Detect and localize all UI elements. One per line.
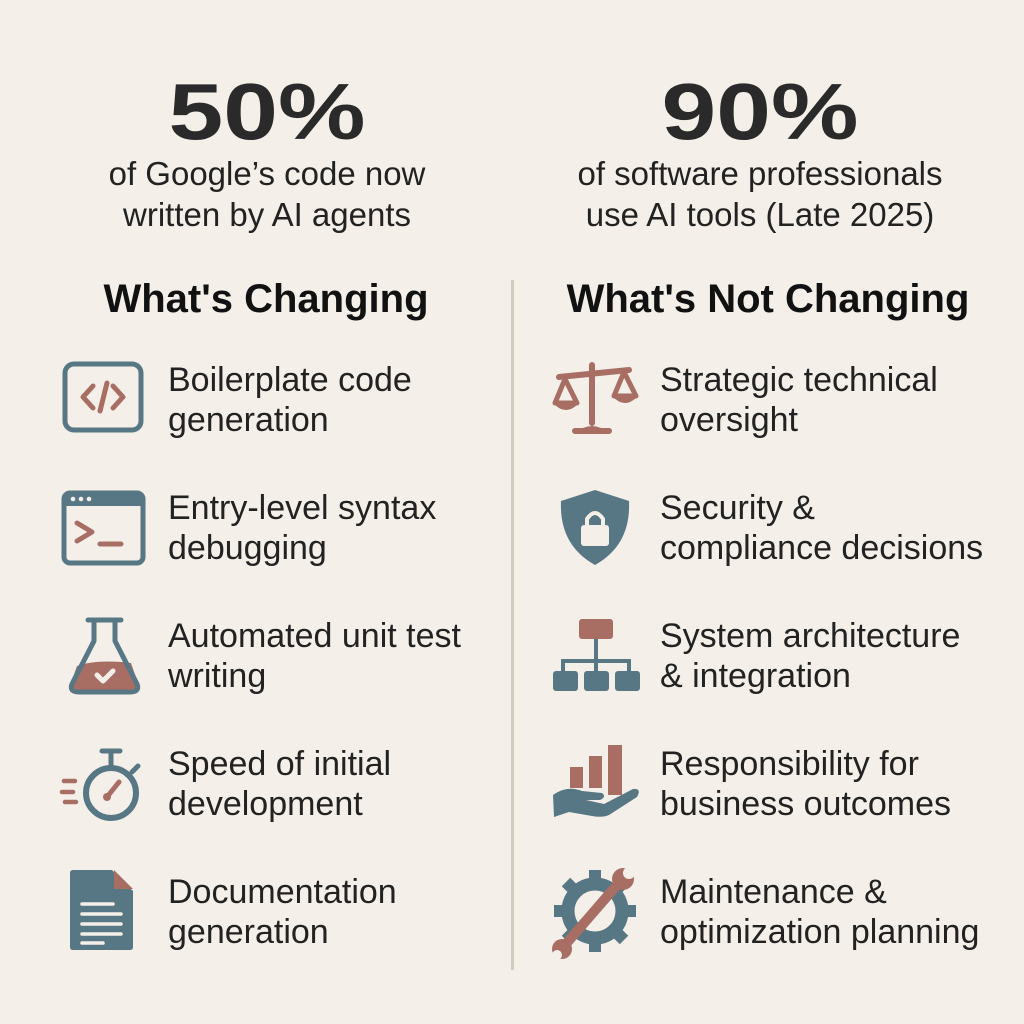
stat caption: written by AI agents: [123, 196, 411, 233]
text: Maintenance &: [660, 873, 887, 911]
text: [660, 361, 938, 439]
text: generation: [168, 913, 329, 951]
heading: What's Not Changing: What's Not Changing: [567, 277, 969, 321]
text: [660, 489, 983, 567]
icon: gear and wrench: [552, 868, 636, 959]
stat: 50%: [109, 67, 426, 233]
stat: 90%: [577, 67, 942, 233]
icon: scales: [552, 362, 638, 434]
text: compliance decisions: [660, 529, 983, 567]
icon: hierarchy: [553, 619, 640, 691]
stat caption: of software professionals: [577, 155, 942, 192]
icon: shield with lock: [560, 490, 630, 565]
text: [168, 361, 412, 439]
text: generation: [168, 401, 329, 439]
item: speed: [60, 745, 391, 823]
text: [168, 873, 397, 951]
item: maintenance: [552, 868, 979, 959]
icon: stopwatch: [60, 748, 140, 821]
text: optimization planning: [660, 913, 979, 951]
text: Speed of initial: [168, 745, 391, 783]
stat caption: use AI tools (Late 2025): [586, 196, 934, 233]
text: [168, 617, 461, 695]
icon: hand with bars: [553, 745, 639, 817]
panel: what's not changing list: [552, 361, 983, 959]
icon: terminal: [62, 490, 146, 566]
stat caption: [109, 155, 426, 233]
text: development: [168, 785, 363, 823]
text: Boilerplate code: [168, 361, 412, 399]
text: Entry-level syntax: [168, 489, 436, 527]
text: [168, 489, 436, 567]
text: [660, 617, 960, 695]
item: boilerplate: [62, 361, 412, 439]
text: Automated unit test: [168, 617, 461, 655]
text: oversight: [660, 401, 798, 439]
text: writing: [168, 657, 266, 695]
text: [660, 873, 979, 951]
item: security: [560, 489, 983, 567]
text: Strategic technical: [660, 361, 938, 399]
panel: what's changing list: [60, 361, 461, 951]
text: [168, 745, 391, 823]
heading: What's Changing: What's Changing: [103, 277, 429, 321]
text: Security &: [660, 489, 815, 527]
text: & integration: [660, 657, 851, 695]
text: business outcomes: [660, 785, 951, 823]
icon: flask: [68, 618, 140, 694]
stat caption: [577, 155, 942, 233]
icon: code: [62, 362, 144, 432]
text: [660, 745, 951, 823]
item: business outcomes: [553, 745, 951, 823]
big number 50%: 50%: [169, 67, 365, 156]
text: Documentation: [168, 873, 397, 911]
stat caption: of Google’s code now: [109, 155, 425, 192]
text: System architecture: [660, 617, 960, 655]
big number 90%: 90%: [662, 67, 858, 156]
item: architecture: [553, 617, 960, 695]
item: documentation: [70, 870, 397, 951]
text: Responsibility for: [660, 745, 919, 783]
text: debugging: [168, 529, 327, 567]
item: unit test: [68, 617, 461, 695]
item: strategic oversight: [552, 361, 938, 439]
icon: document: [70, 870, 133, 950]
item: syntax debugging: [62, 489, 436, 567]
